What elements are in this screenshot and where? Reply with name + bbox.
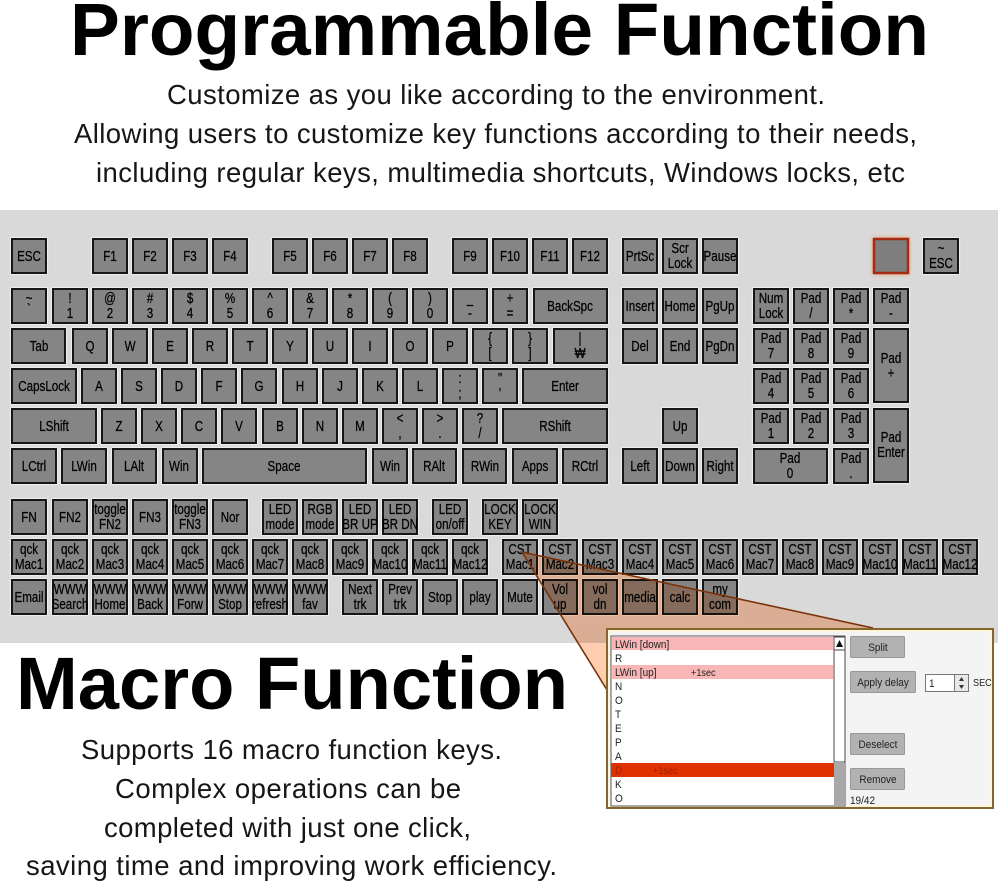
macro step list: T [615, 708, 621, 721]
key row: media keys: my [712, 581, 728, 597]
key row: FN and LED keys: FN2 [99, 516, 121, 532]
key row: quick and custom macro keys: qck [101, 541, 119, 557]
key row: number row: ^ [267, 290, 274, 306]
key row: FN and LED keys: BR UP [342, 516, 378, 532]
key row: quick and custom macro keys: Mac7 [256, 556, 284, 572]
key row: FN and LED keys: FN2 [59, 509, 81, 525]
key row: number row: 7 [307, 305, 313, 321]
macro step list: +1sec [653, 765, 678, 777]
key row: shift row: V [235, 418, 243, 434]
key row: quick and custom macro keys: qck [461, 541, 479, 557]
key row: QWERTY row: 7 [768, 345, 774, 361]
key row: number row: 6 [267, 305, 273, 321]
macro step list: LWin [up] [615, 666, 656, 679]
key row: QWERTY row: } [528, 330, 533, 346]
key row: quick and custom macro keys [12, 540, 977, 574]
key row: quick and custom macro keys: CST [948, 541, 972, 557]
key row: quick and custom macro keys: Mac10 [863, 556, 897, 572]
key row: number row: Pad [841, 290, 861, 306]
key row: bottom row: 0 [787, 465, 793, 481]
key row: QWERTY row: Pad [841, 330, 861, 346]
key row: quick and custom macro keys: qck [381, 541, 399, 557]
key row: function keys: PrtSc [626, 248, 655, 264]
key row: QWERTY row: ] [528, 345, 532, 361]
key row: home row: " [498, 370, 502, 386]
key row: media keys: play [469, 589, 491, 605]
key row: bottom row [12, 449, 868, 483]
key row: quick and custom macro keys: Mac5 [666, 556, 694, 572]
key row: number row: 8 [347, 305, 353, 321]
key row: home row: Pad [841, 370, 861, 386]
key row: QWERTY row: R [206, 338, 214, 354]
key row: shift row: C [195, 418, 203, 434]
key row: function keys: F4 [223, 248, 237, 264]
key row: quick and custom macro keys: CST [588, 541, 612, 557]
button: Deselect [850, 734, 904, 754]
key row: media keys: WWW [54, 581, 87, 597]
key row: QWERTY row: Q [85, 338, 95, 354]
key row: quick and custom macro keys: Mac9 [826, 556, 854, 572]
key row: home row: D [175, 378, 183, 394]
key row: FN and LED keys: LED [349, 501, 371, 517]
key row: QWERTY row: [ [488, 345, 492, 361]
counter: 19/42: 19/42 [850, 794, 875, 807]
key row: QWERTY row: Tab [30, 338, 48, 354]
key row: quick and custom macro keys: qck [61, 541, 79, 557]
button: Apply delay [850, 672, 916, 692]
text block: macro description: Complex operations can be [115, 773, 461, 804]
key row: QWERTY row: T [246, 338, 254, 354]
macro step list: D [615, 764, 622, 777]
key row: QWERTY row: O [405, 338, 415, 354]
key row: shift row: / [478, 425, 482, 441]
text block: programmable description: including regular keys, multimedia shortcuts, Windows locks, etc [96, 157, 905, 188]
key row: number row: Pad [881, 290, 901, 306]
text block: programmable description: Customize as you like according to the environment. [167, 79, 825, 110]
key row: bottom row: Pad [841, 450, 861, 466]
key row: FN and LED keys: FN3 [179, 516, 201, 532]
key row: home row: CapsLock [18, 378, 70, 394]
key row: bottom row: Left [630, 458, 650, 474]
key row: quick and custom macro keys: Mac7 [746, 556, 774, 572]
key row: bottom row: RAlt [423, 458, 445, 474]
key row: number row: ) [428, 290, 432, 306]
key row: quick and custom macro keys: CST [788, 541, 812, 557]
key row: shift row: Pad [881, 429, 901, 445]
callout: funnel from CST Mac1 key to macro panel [522, 552, 873, 690]
key row: media keys: Vol [552, 581, 568, 597]
panel: macro editor window [607, 629, 993, 808]
key row: shift row [12, 409, 908, 482]
key row: media keys: Prev [388, 581, 412, 597]
key row: media keys: WWW [254, 581, 287, 597]
key row: function keys: F6 [323, 248, 337, 264]
key row: quick and custom macro keys: qck [141, 541, 159, 557]
key row: number row: & [306, 290, 314, 306]
key row: media keys [12, 580, 737, 614]
key row: QWERTY row: ₩ [575, 345, 586, 361]
key row: shift row: X [155, 418, 163, 434]
key row: shift row: . [438, 425, 442, 441]
key row: number row: # [147, 290, 154, 306]
key row: number row: 3 [147, 305, 153, 321]
key row: function keys: F5 [283, 248, 297, 264]
macro step list: O [615, 792, 623, 805]
key row: home row: Pad [761, 370, 781, 386]
key row: quick and custom macro keys: CST [828, 541, 852, 557]
key row: shift row: M [355, 418, 365, 434]
key row: function keys: F3 [183, 248, 197, 264]
title: Macro Function: Macro Function [16, 642, 568, 725]
key row: function keys: ESC [929, 255, 953, 271]
key row: number row: 1 [67, 305, 73, 321]
button: Split [850, 636, 904, 658]
key row: media keys: up [554, 596, 566, 612]
key row: home row: : [458, 370, 462, 386]
key row: bottom row: Down [665, 458, 695, 474]
key row: quick and custom macro keys: CST [708, 541, 732, 557]
key row: number row: + [507, 290, 514, 306]
key row: quick and custom macro keys: Mac2 [546, 556, 574, 572]
key row: quick and custom macro keys: Mac6 [706, 556, 734, 572]
key row: number row: % [225, 290, 235, 306]
key row: shift row: Pad [841, 410, 861, 426]
key row: home row: K [376, 378, 384, 394]
key row: media keys: Home [95, 596, 125, 612]
key row: quick and custom macro keys: Mac3 [586, 556, 614, 572]
key row: QWERTY row: + [888, 365, 895, 381]
key row: media keys: trk [394, 596, 407, 612]
text block: macro description: saving time and improving work efficiency. [26, 850, 557, 881]
key row: media keys: WWW [134, 581, 167, 597]
key row: media keys: trk [354, 596, 367, 612]
key row: home row: Enter [551, 378, 579, 394]
key row: number row: 9 [387, 305, 393, 321]
key row: bottom row: RWin [471, 458, 499, 474]
key row: function keys [12, 239, 958, 273]
key row: quick and custom macro keys: Mac4 [626, 556, 654, 572]
key row: FN and LED keys: BR DN [382, 516, 418, 532]
macro step list: O [615, 694, 623, 707]
key row: QWERTY row: Y [286, 338, 294, 354]
key row: number row: ( [388, 290, 393, 306]
key row: media keys: com [709, 596, 731, 612]
key row: number row: Pad [801, 290, 821, 306]
key row: number row: * [849, 305, 853, 321]
key row: QWERTY row: End [670, 338, 690, 354]
key row: FN and LED keys: RGB [307, 501, 333, 517]
key row: function keys: ESC [17, 248, 41, 264]
key row: quick and custom macro keys: Mac6 [216, 556, 244, 572]
keyboard layout [12, 239, 977, 614]
key row: QWERTY row: U [326, 338, 334, 354]
key row: quick and custom macro keys: Mac3 [96, 556, 124, 572]
key row: home row: 6 [848, 385, 854, 401]
key row: home row [12, 369, 868, 403]
key row: quick and custom macro keys: Mac11 [903, 556, 937, 572]
key row: quick and custom macro keys: Mac5 [176, 556, 204, 572]
key row: number row: - [889, 305, 893, 321]
key row: quick and custom macro keys: qck [421, 541, 439, 557]
key row: QWERTY row: Pad [761, 330, 781, 346]
key row: bottom row: Apps [522, 458, 549, 474]
delay spin box: 1 [929, 677, 935, 690]
key row: bottom row: Space [268, 458, 300, 474]
key row: QWERTY row: { [488, 330, 493, 346]
key row: number row: ` [27, 301, 31, 317]
key row: QWERTY row: 8 [808, 345, 814, 361]
key row: media keys: Stop [218, 596, 242, 612]
key row: media keys: dn [594, 596, 606, 612]
key row: function keys: F10 [500, 248, 520, 264]
scrollbar [834, 637, 845, 805]
key row: FN and LED keys: LED [389, 501, 411, 517]
key row: media keys: vol [593, 581, 607, 597]
button: Apply delay: Apply delay [857, 676, 909, 689]
key row: media keys: WWW [94, 581, 127, 597]
key row: home row: 5 [808, 385, 814, 401]
key row: shift row: N [316, 418, 324, 434]
key row: QWERTY row: Pad [801, 330, 821, 346]
key row: QWERTY row: | [578, 330, 582, 346]
key row: quick and custom macro keys: CST [628, 541, 652, 557]
key row: quick and custom macro keys: qck [341, 541, 359, 557]
key row: shift row: 3 [848, 425, 854, 441]
key row: quick and custom macro keys: Mac10 [373, 556, 407, 572]
key row: shift row: < [397, 410, 404, 426]
key row: home row: H [296, 378, 304, 394]
key row: QWERTY row: I [368, 338, 372, 354]
key row: number row: 2 [107, 305, 113, 321]
key row: QWERTY row: 9 [848, 345, 854, 361]
key row: number row: Lock [759, 305, 784, 321]
key row: shift row: 1 [768, 425, 774, 441]
key row: FN and LED keys: FN3 [139, 509, 161, 525]
key row: quick and custom macro keys: qck [261, 541, 279, 557]
delay spin box [926, 674, 968, 692]
key row: quick and custom macro keys: CST [868, 541, 892, 557]
key row: quick and custom macro keys: CST [908, 541, 932, 557]
key row: quick and custom macro keys: Mac8 [786, 556, 814, 572]
key row: number row: PgUp [705, 298, 735, 314]
key row: FN and LED keys: Nor [221, 509, 240, 525]
key row: FN and LED keys [12, 500, 557, 534]
macro step list: +1sec [691, 667, 716, 679]
key row: bottom row: LCtrl [22, 458, 46, 474]
key row: quick and custom macro keys: Mac2 [56, 556, 84, 572]
key row: shift row: B [276, 418, 284, 434]
key row: media keys: Search [52, 596, 88, 612]
text block: macro description: completed with just one click, [104, 812, 471, 843]
key row: home row: ' [499, 385, 501, 401]
key row: quick and custom macro keys: CST [548, 541, 572, 557]
key row: shift row: Up [673, 418, 687, 434]
key row: media keys: WWW [174, 581, 207, 597]
key row: shift row: Pad [761, 410, 781, 426]
key row: number row: @ [104, 290, 116, 306]
button: Split: Split [868, 641, 888, 654]
macro step list: A [615, 750, 622, 763]
key row: number row: BackSpc [547, 298, 593, 314]
key row: bottom row: LAlt [124, 458, 144, 474]
key row: number row: = [507, 305, 514, 321]
key row: shift row: , [398, 425, 402, 441]
key row: home row: L [417, 378, 423, 394]
key row: number row: _ [466, 290, 474, 306]
text block: macro description [26, 734, 557, 881]
key row: shift row: Pad [801, 410, 821, 426]
key row: number row: Insert [626, 298, 655, 314]
key row: FN and LED keys: LOCK [524, 501, 556, 517]
key row: quick and custom macro keys: Mac12 [453, 556, 487, 572]
macro step list: R [615, 652, 622, 665]
key row: function keys: Pause [704, 248, 736, 264]
key row: quick and custom macro keys: Mac1 [506, 556, 534, 572]
key row: shift row: RShift [539, 418, 571, 434]
macro step list: E [615, 722, 622, 735]
key row: FN and LED keys: LED [269, 501, 291, 517]
key row: media keys: Email [15, 589, 44, 605]
key row: QWERTY row: Del [631, 338, 649, 354]
key row: media keys: Mute [507, 589, 533, 605]
key row: quick and custom macro keys: Mac11 [413, 556, 447, 572]
key row: media keys: WWW [214, 581, 247, 597]
button: Remove: Remove [859, 773, 897, 786]
key row: function keys: F12 [580, 248, 600, 264]
panel: keyboard background [0, 210, 998, 643]
key row: media keys: Forw [177, 596, 203, 612]
key row: number row: ! [68, 290, 72, 306]
key row: FN and LED keys: toggle [174, 501, 206, 517]
key row: home row: S [135, 378, 143, 394]
macro step list: N [615, 680, 622, 693]
key row: bottom row: . [849, 465, 853, 481]
key row: number row: / [809, 305, 813, 321]
macro step list [611, 636, 845, 806]
key row: number row: * [348, 290, 352, 306]
key row: function keys: Scr [671, 240, 689, 256]
key row: home row: G [254, 378, 264, 394]
key row: FN and LED keys: LED [439, 501, 461, 517]
key row: shift row: LShift [39, 418, 69, 434]
key row: media keys: Back [137, 596, 163, 612]
label: SEC: SEC [973, 677, 992, 689]
macro step list: P [615, 736, 622, 749]
key row: shift row: Enter [877, 444, 905, 460]
text block: programmable description: Allowing users to customize key functions according to their needs, [74, 118, 917, 149]
button: Deselect: Deselect [859, 738, 897, 751]
key row: FN and LED keys: LOCK [484, 501, 516, 517]
key row: number row: $ [187, 290, 194, 306]
key row: FN and LED keys: mode [305, 516, 335, 532]
key row: FN and LED keys: toggle [94, 501, 126, 517]
key row: function keys: F7 [363, 248, 377, 264]
key row: FN and LED keys: KEY [488, 516, 512, 532]
key row: number row: 5 [227, 305, 233, 321]
key row: media keys: Stop [428, 589, 452, 605]
key row: quick and custom macro keys: qck [221, 541, 239, 557]
key row: number row: Home [665, 298, 695, 314]
key row: bottom row: Win [380, 458, 400, 474]
key row: quick and custom macro keys: qck [181, 541, 199, 557]
key row: home row: J [337, 378, 343, 394]
key row: quick and custom macro keys: Mac1 [15, 556, 43, 572]
key row: media keys: calc [670, 589, 691, 605]
key row: function keys: F11 [540, 248, 560, 264]
key row: bottom row: Pad [780, 450, 800, 466]
key row: function keys: Lock [668, 255, 693, 271]
key row: shift row: > [437, 410, 444, 426]
key row: quick and custom macro keys: CST [668, 541, 692, 557]
key row: FN and LED keys: FN [21, 509, 37, 525]
text block: programmable description [74, 79, 917, 188]
key row: QWERTY row: P [446, 338, 454, 354]
key row: quick and custom macro keys: qck [20, 541, 38, 557]
key row: number row: 4 [187, 305, 193, 321]
key row: media keys: WWW [294, 581, 327, 597]
button: Remove [850, 768, 904, 790]
icon: highlighted blank key [874, 239, 908, 273]
key row: QWERTY row: W [125, 338, 136, 354]
key row: FN and LED keys: WIN [529, 516, 551, 532]
key row: function keys: F9 [463, 248, 477, 264]
key row: media keys: Next [348, 581, 372, 597]
key row: home row: A [95, 378, 103, 394]
key row: QWERTY row: E [166, 338, 174, 354]
macro step list: LWin [down] [615, 638, 669, 651]
key row: quick and custom macro keys: Mac8 [296, 556, 324, 572]
key row: home row: Pad [801, 370, 821, 386]
key row: media keys: fav [302, 596, 318, 612]
key row: media keys: refresh [252, 596, 288, 612]
key row: bottom row: RCtrl [572, 458, 598, 474]
text block: macro description: Supports 16 macro function keys. [81, 734, 502, 765]
key row: function keys: F1 [103, 248, 117, 264]
key row: quick and custom macro keys: Mac4 [136, 556, 164, 572]
key row: shift row: Z [115, 418, 123, 434]
key row: home row: 4 [768, 385, 774, 401]
key row: bottom row: Win [169, 458, 189, 474]
key row: media keys: media [624, 589, 656, 605]
key row: function keys: ~ [938, 240, 945, 256]
key row: function keys: F2 [143, 248, 157, 264]
key row: quick and custom macro keys: Mac9 [336, 556, 364, 572]
key row: QWERTY row [12, 329, 908, 402]
key row: function keys: F8 [403, 248, 417, 264]
macro step list: K [615, 778, 622, 791]
key row: number row: ~ [26, 290, 33, 306]
key row: quick and custom macro keys: CST [748, 541, 772, 557]
key row: bottom row: Right [707, 458, 734, 474]
key row: bottom row: LWin [71, 458, 97, 474]
key row: QWERTY row: PgDn [705, 338, 735, 354]
key row: quick and custom macro keys: CST [508, 541, 532, 557]
key row: number row: 0 [427, 305, 433, 321]
key row: shift row: ? [477, 410, 483, 426]
key row: number row: - [468, 305, 472, 321]
key row: number row: Num [759, 290, 783, 306]
key row: quick and custom macro keys: Mac12 [943, 556, 977, 572]
key row: QWERTY row: Pad [881, 350, 901, 366]
key row: quick and custom macro keys: qck [301, 541, 319, 557]
key row: number row [12, 289, 908, 323]
key row: home row: ; [458, 385, 462, 401]
key row: FN and LED keys: mode [265, 516, 295, 532]
key row: home row: F [215, 378, 223, 394]
key row: FN and LED keys: on/off [436, 516, 465, 532]
key row: shift row: 2 [808, 425, 814, 441]
